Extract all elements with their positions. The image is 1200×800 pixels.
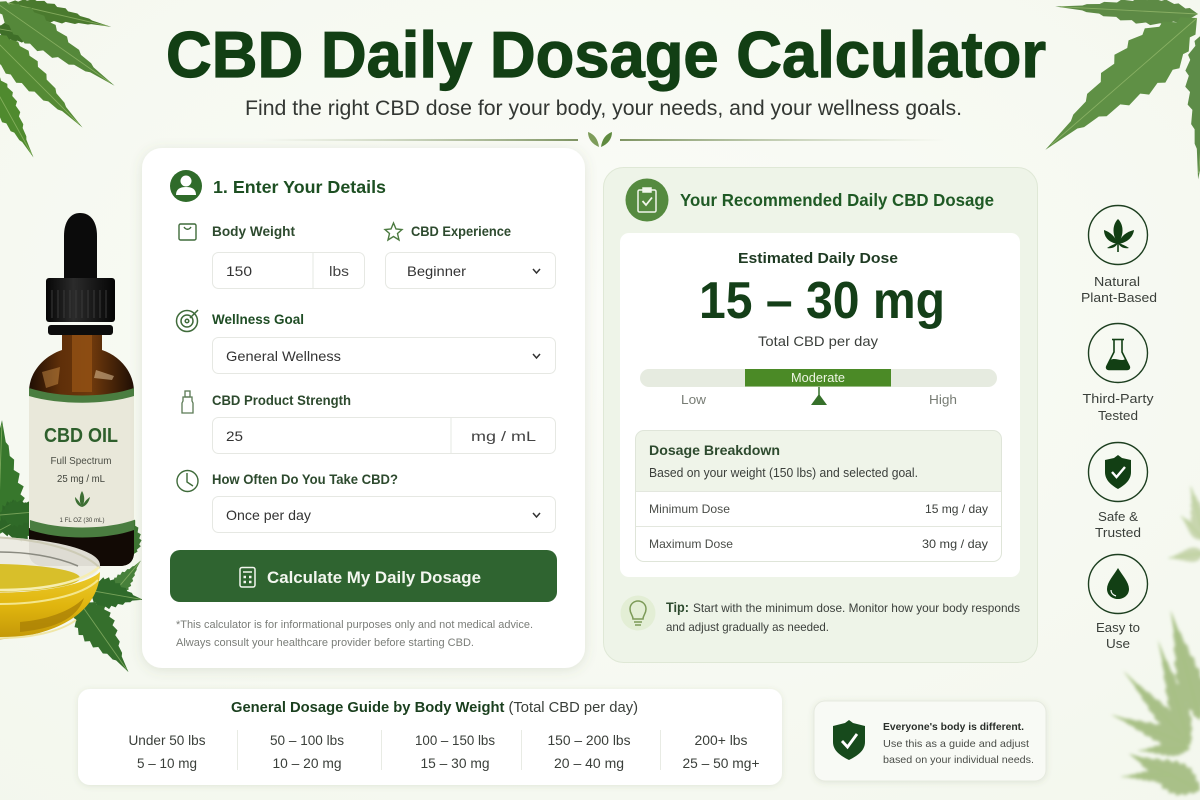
- disclaimer: [176, 619, 533, 649]
- dosage breakdown: Dosage Breakdown: [649, 442, 780, 458]
- field: wellness goal: Wellness Goal: [212, 312, 304, 327]
- field: frequency: [177, 470, 556, 532]
- field: body weight: Body Weight: [212, 224, 296, 239]
- decorative leaf: right middle blurred: [1166, 483, 1200, 566]
- dosage range gauge: Low: [681, 392, 707, 407]
- disclaimer: Always consult your healthcare provider before starting CBD.: [176, 637, 474, 649]
- table values: 10 – 20 mg: [272, 756, 342, 771]
- dosage breakdown: Maximum Dose: [649, 537, 733, 551]
- badge: third-party tested: Third-Party: [1082, 391, 1154, 406]
- calculate button: [170, 550, 557, 602]
- field: wellness goal: [176, 310, 556, 374]
- bottle label: [29, 388, 134, 538]
- badge: natural plant-based: [1081, 206, 1157, 305]
- table values: [128, 733, 760, 771]
- table values: 50 – 100 lbs: [270, 733, 344, 748]
- amber glass: [29, 335, 134, 566]
- bottle label: 1 FL OZ (30 mL): [60, 517, 104, 524]
- badge: safe and trusted: [1088, 442, 1148, 540]
- callout: individual needs: [814, 701, 1046, 781]
- badge: third-party tested: Tested: [1098, 408, 1138, 423]
- callout: individual needs: Everyone's body is different.: [883, 721, 1024, 733]
- decorative leaf: top right: [1027, 0, 1200, 181]
- callout: individual needs: based on your individual needs.: [883, 754, 1034, 766]
- field: frequency: How Often Do You Take CBD?: [212, 472, 398, 487]
- dosage breakdown: [636, 430, 1002, 562]
- dosage breakdown: 30 mg / day: [922, 537, 988, 551]
- field: body weight: 150: [226, 263, 252, 279]
- field: body weight: lbs: [329, 263, 349, 279]
- leaves behind bottle: [0, 419, 148, 683]
- bottle label: 25 mg / mL: [57, 473, 105, 485]
- field: body weight: [179, 224, 364, 288]
- badge: third-party tested: [1082, 324, 1154, 423]
- table values: 100 – 150 lbs: [415, 733, 495, 748]
- badge: natural plant-based: Plant-Based: [1081, 290, 1157, 305]
- dose value: 15 – 30 mg: [699, 272, 945, 330]
- dosage breakdown: Based on your weight (150 lbs) and selected goal.: [649, 466, 918, 480]
- field: CBD experience: Beginner: [407, 263, 466, 279]
- bottle label: Full Spectrum: [50, 455, 112, 467]
- table values: 25 – 50 mg+: [682, 756, 760, 771]
- field: CBD experience: [385, 223, 556, 288]
- form heading: [170, 170, 386, 202]
- dosage range gauge: Moderate: [791, 371, 845, 385]
- calculate button: Calculate My Daily Dosage: [267, 568, 481, 587]
- field: frequency: Once per day: [226, 507, 311, 523]
- panel heading: [626, 178, 994, 222]
- panel: recommended dosage: [604, 168, 1038, 662]
- callout: individual needs: Use this as a guide and adjust: [883, 738, 1029, 750]
- result card: [620, 233, 1020, 577]
- dosage breakdown: 15 mg / day: [925, 502, 988, 516]
- table values: 150 – 200 lbs: [548, 733, 631, 748]
- panel heading: Your Recommended Daily CBD Dosage: [680, 190, 994, 210]
- dosage breakdown: Minimum Dose: [649, 502, 730, 516]
- panel: enter details form: [142, 148, 585, 668]
- decorative leaf: bottom right blurred: [1107, 606, 1200, 800]
- table values: 200+ lbs: [694, 733, 748, 748]
- title: CBD Daily Dosage Calculator: [166, 18, 1046, 91]
- tip: Tip:: [666, 600, 689, 615]
- field: product strength: mg / mL: [471, 428, 536, 444]
- badge: easy to use: Use: [1106, 636, 1130, 651]
- dosage range gauge: High: [929, 392, 957, 407]
- table values: 5 – 10 mg: [137, 756, 197, 771]
- badge: natural plant-based: Natural: [1094, 274, 1140, 289]
- table title: General Dosage Guide by Body Weight (Total CBD per day): [231, 700, 638, 716]
- panel: dosage guide table: [78, 689, 782, 785]
- table values: 15 – 30 mg: [420, 756, 490, 771]
- decorative leaf: top left: [0, 0, 124, 164]
- field: product strength: [182, 391, 556, 454]
- bottle cap: [46, 278, 115, 335]
- table values: Under 50 lbs: [128, 733, 206, 748]
- tip: Start with the minimum dose. Monitor how your body responds: [693, 601, 1020, 615]
- field: product strength: CBD Product Strength: [212, 393, 351, 408]
- product bottle: [29, 213, 134, 566]
- bottle label: CBD OIL: [44, 425, 118, 447]
- result card: Total CBD per day: [758, 333, 878, 349]
- badge: safe and trusted: Safe &: [1098, 509, 1138, 524]
- result card: Estimated Daily Dose: [738, 250, 898, 267]
- table values: 20 – 40 mg: [554, 756, 624, 771]
- tip: and adjust gradually as needed.: [666, 620, 829, 634]
- dropper bulb: [64, 213, 97, 280]
- badge: easy to use: [1088, 554, 1148, 651]
- divider with leaf icon: [262, 132, 945, 147]
- dosage range gauge: [640, 369, 997, 407]
- subtitle: Find the right CBD dose for your body, your needs, and your wellness goals.: [245, 97, 962, 120]
- glass bowl of oil: [0, 537, 100, 640]
- field: product strength: 25: [226, 428, 243, 444]
- form heading: 1. Enter Your Details: [213, 177, 386, 197]
- tip: [620, 596, 1020, 634]
- field: wellness goal: General Wellness: [226, 348, 341, 364]
- badge: easy to use: Easy to: [1096, 620, 1140, 635]
- field: CBD experience: CBD Experience: [411, 224, 511, 239]
- badge: safe and trusted: Trusted: [1095, 525, 1141, 540]
- disclaimer: *This calculator is for informational purposes only and not medical advice.: [176, 619, 533, 631]
